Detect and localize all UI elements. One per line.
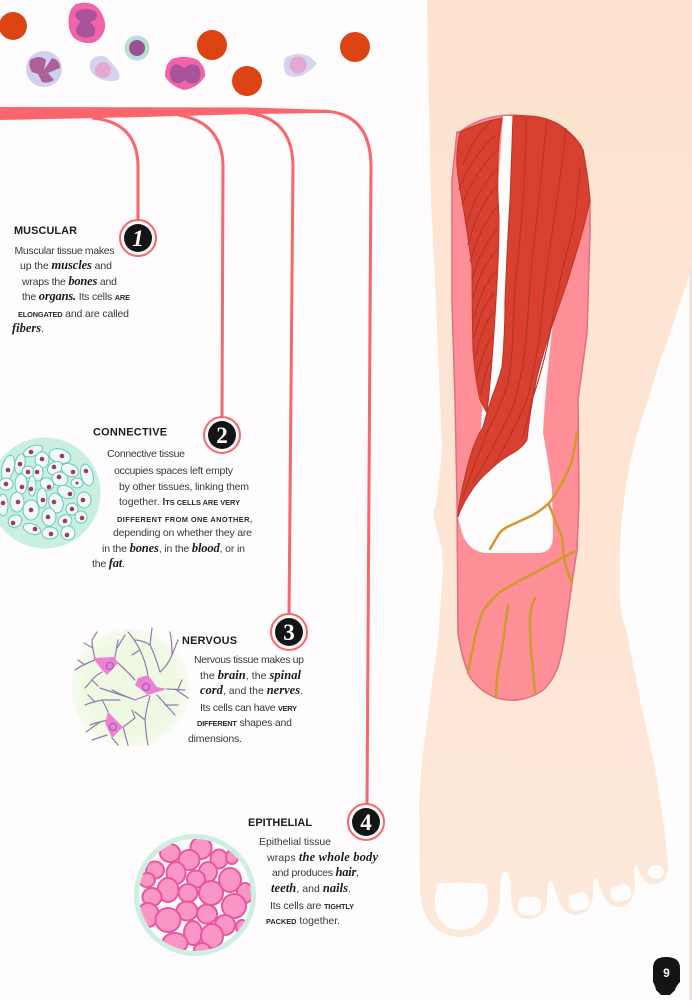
description: Its cells can have VERY — [200, 702, 297, 714]
lymphocyte — [124, 36, 150, 60]
branch 4 — [322, 111, 371, 806]
description — [188, 654, 304, 745]
description — [92, 448, 252, 570]
branch 2 — [178, 115, 223, 418]
connective tissue micrograph — [0, 438, 100, 548]
description: up the muscles and — [20, 258, 112, 272]
number badge 1: 1 — [132, 226, 144, 251]
page number badge: 9 — [663, 966, 670, 980]
epithelial micrograph — [134, 834, 256, 957]
description: Connective tissue — [107, 448, 185, 460]
description: wraps the bones and — [21, 274, 117, 288]
description: PACKED together. — [266, 915, 340, 927]
number badge 4: 4 — [360, 810, 372, 835]
heading: CONNECTIVE — [93, 426, 167, 438]
description: wraps the whole body — [266, 850, 378, 864]
blood cells — [0, 3, 370, 96]
muscle: main belly — [458, 116, 590, 517]
description: Nervous tissue makes up — [194, 654, 304, 666]
heading: MUSCULAR — [14, 225, 77, 237]
number badge 2 — [204, 417, 240, 453]
number badge 3: 3 — [283, 620, 295, 645]
description: the fat. — [92, 556, 125, 570]
branch 3 — [248, 113, 293, 616]
description: Muscular tissue makes — [14, 245, 114, 257]
description: ELONGATED and are called — [18, 308, 129, 320]
number badge 1 — [120, 220, 156, 256]
muscle fibres — [459, 117, 580, 497]
description: occupies spaces left empty — [114, 465, 234, 477]
description: Epithelial tissue — [259, 836, 331, 848]
branch 1 — [92, 118, 138, 222]
red blood cells — [0, 12, 370, 96]
description: teeth, and nails. — [271, 881, 351, 895]
description: fibers. — [12, 321, 44, 335]
description: the brain, the spinal — [200, 668, 302, 682]
neuron micrograph — [71, 628, 189, 747]
muscle: pennate band — [457, 118, 502, 413]
pale white cells — [26, 51, 317, 87]
panel: connective — [0, 417, 252, 570]
main vessel — [0, 107, 330, 120]
heading: EPITHELIAL — [248, 817, 312, 829]
heading: NERVOUS — [182, 635, 237, 647]
description: DIFFERENT FROM ONE ANOTHER, — [117, 515, 252, 524]
description: Its cells are TIGHTLY — [270, 900, 354, 912]
pink granulocytes — [68, 3, 205, 90]
description: and produces hair, — [272, 865, 359, 879]
page number badge — [653, 957, 680, 995]
description: cord, and the nerves. — [200, 683, 303, 697]
description: dimensions. — [188, 733, 242, 745]
leg and foot silhouette — [419, 0, 692, 937]
illustration: leg and foot — [419, 0, 692, 937]
description: the organs. Its cells ARE — [22, 289, 130, 303]
panel: muscular — [12, 220, 156, 335]
number badge 3 — [271, 614, 307, 650]
white bone area — [458, 116, 553, 553]
description: together. ITS CELLS ARE VERY — [119, 496, 240, 508]
pink tissue window — [452, 115, 590, 700]
nerves — [468, 432, 577, 697]
number badge 4 — [348, 804, 384, 840]
panel: epithelial — [134, 804, 384, 957]
description: DIFFERENT shapes and — [197, 717, 292, 729]
description: by other tissues, linking them — [119, 481, 249, 493]
description: in the bones, in the blood, or in — [102, 541, 245, 555]
vessel tree — [0, 107, 371, 806]
number badge 2: 2 — [216, 423, 228, 448]
description — [12, 245, 130, 335]
description: depending on whether they are — [113, 527, 252, 539]
panel: nervous — [71, 614, 307, 747]
toenails — [435, 865, 664, 930]
description — [259, 836, 378, 927]
